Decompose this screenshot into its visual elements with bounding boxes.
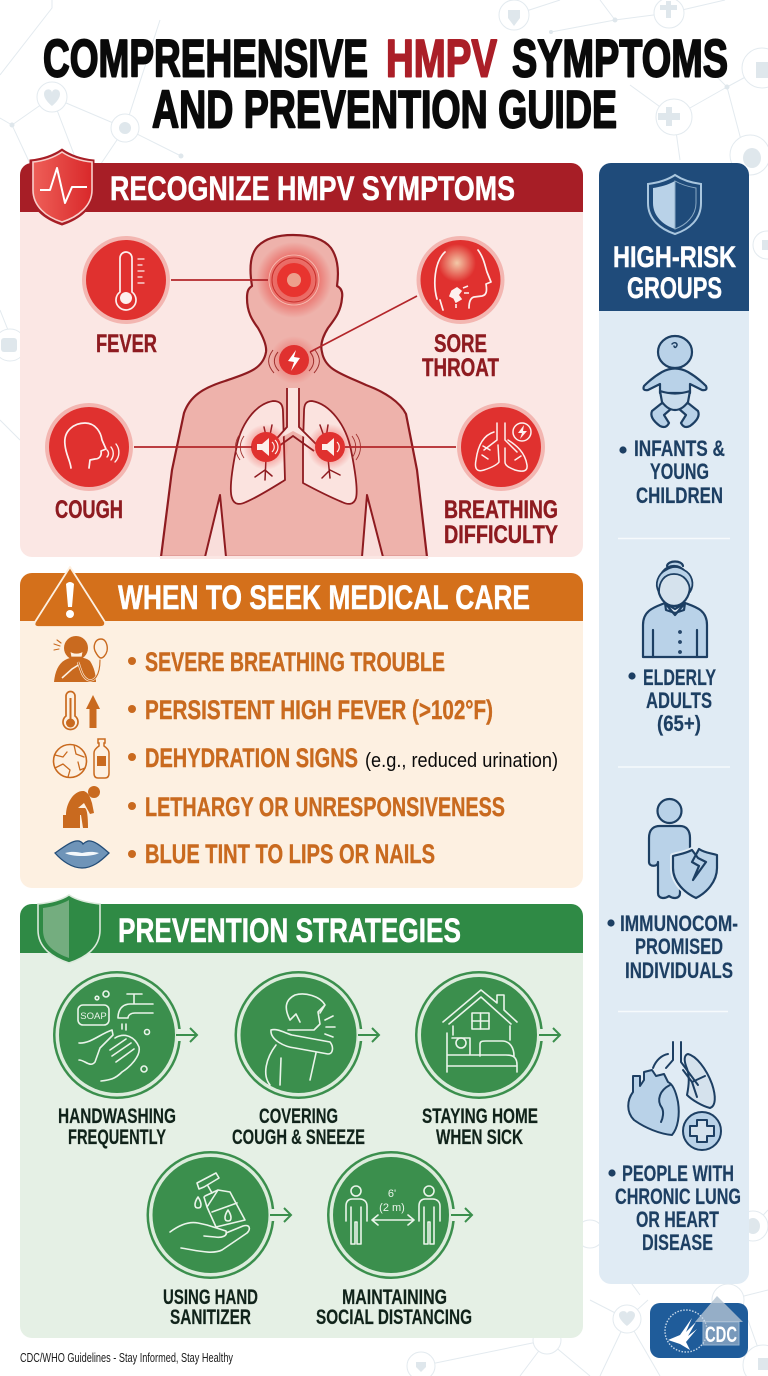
text: infants: INFANTS & (634, 436, 725, 461)
strategy: covering cough (234, 971, 379, 1099)
text: immunocompromised (607, 911, 738, 983)
icon: high fever thermometer (63, 692, 100, 730)
panel: prevention strategies (20, 895, 583, 1338)
icon: dehydration (54, 739, 109, 778)
icon: warning triangle (34, 567, 105, 627)
panel: high-risk groups (599, 163, 749, 1284)
heading: prevention: PREVENTION STRATEGIES (118, 912, 461, 950)
label: handwashing: HANDWASHING (58, 1104, 176, 1128)
strategy: social distancing: (2 m) (379, 1202, 405, 1214)
text: dehydration signs: DEHYDRATION SIGNS (145, 743, 358, 773)
title: HMPV (386, 30, 497, 88)
icon: person with oxygen mask (54, 636, 107, 682)
footer note: CDC/WHO Guidelines - Stay Informed, Stay Healthy (20, 1351, 234, 1365)
label: covering cough: COUGH & SNEEZE (232, 1125, 365, 1149)
panel: when to seek medical care (20, 567, 583, 888)
label: covering cough (232, 1104, 365, 1149)
text: severe breathing trouble: SEVERE BREATHING TROUBLE (145, 647, 445, 677)
text: dehydration signs: (e.g., reduced urination) (365, 750, 558, 772)
text: chronic disease: DISEASE (642, 1230, 713, 1255)
heading: seek care: WHEN TO SEEK MEDICAL CARE (118, 579, 530, 617)
throat pain marker (269, 336, 319, 384)
icon: lethargy (63, 786, 100, 828)
label: social distancing (316, 1285, 472, 1329)
label: hand sanitizer (163, 1285, 258, 1329)
icon: cough (45, 403, 133, 491)
label: sore throat: SORE (434, 330, 487, 358)
text: infants: CHILDREN (636, 483, 723, 508)
label: sore throat (422, 330, 499, 382)
text: elderly: ADULTS (646, 688, 712, 713)
label: staying home: WHEN SICK (436, 1125, 523, 1149)
text: chronic disease (608, 1161, 741, 1255)
text: elderly: ELDERLY (643, 665, 716, 690)
text: persistent high fever: PERSISTENT HIGH FEVER (>102°F) (145, 695, 493, 725)
icon: infant (644, 336, 706, 427)
strategy: handwashing (53, 971, 197, 1099)
icon: breathing difficulty (457, 403, 545, 491)
text: immunocompromised: INDIVIDUALS (625, 958, 733, 983)
text: immunocompromised: PROMISED (635, 934, 723, 959)
label: breathing difficulty: BREATHING (444, 496, 558, 524)
heading: high-risk groups (613, 241, 736, 305)
label: staying home (422, 1104, 538, 1149)
lung sound markers (236, 424, 360, 470)
label: sore throat: THROAT (422, 354, 499, 382)
icon: elderly adult (643, 562, 707, 657)
icon: fever thermometer (82, 236, 170, 324)
label: social distancing: SOCIAL DISTANCING (316, 1305, 472, 1329)
head pain marker (256, 242, 332, 318)
label: covering cough: COVERING (259, 1104, 338, 1128)
text: lethargy: LETHARGY OR UNRESPONSIVENESS (145, 792, 505, 822)
label: hand sanitizer: SANITIZER (170, 1305, 251, 1329)
icon: immunocompromised (649, 799, 717, 898)
text: blue tint: BLUE TINT TO LIPS OR NAILS (145, 839, 435, 869)
label: cough: COUGH (55, 496, 123, 524)
text: elderly: (65+) (657, 711, 701, 736)
panel: recognize HMPV symptoms (20, 149, 583, 559)
icon: green shield (38, 895, 100, 963)
label: fever: FEVER (96, 330, 157, 358)
lungs (231, 401, 357, 504)
strategy: social distancing: 6' (388, 1188, 396, 1200)
label: handwashing: FREQUENTLY (68, 1125, 166, 1149)
heading: high-risk groups: HIGH-RISK (613, 241, 736, 274)
label: staying home: STAYING HOME (422, 1104, 538, 1128)
text: infants: YOUNG (650, 459, 709, 484)
icon: heartbeat shield (30, 149, 94, 225)
icon: blue shield (648, 175, 701, 234)
text: infants (619, 436, 725, 508)
CDC logo: CDC (705, 1322, 737, 1347)
title: COMPREHENSIVE (43, 30, 368, 88)
heading: recognize symptoms: RECOGNIZE HMPV SYMPTOMS (110, 170, 515, 208)
text: severe breathing trouble (128, 647, 445, 677)
icon: heart and lungs (628, 1042, 721, 1150)
body diagram (160, 235, 428, 559)
label: social distancing: MAINTAINING (342, 1285, 447, 1309)
strategy: social distancing (327, 1151, 472, 1279)
title (43, 30, 728, 140)
label: hand sanitizer: USING HAND (163, 1285, 258, 1309)
text: chronic disease: OR HEART (636, 1207, 719, 1232)
icon: sore throat (416, 236, 504, 324)
label: breathing difficulty (444, 496, 558, 549)
connector lines (134, 280, 456, 447)
text: dehydration signs (128, 743, 558, 773)
strategy: staying home (415, 971, 560, 1099)
CDC logo (650, 1296, 748, 1358)
label: handwashing (58, 1104, 176, 1149)
label: breathing difficulty: DIFFICULTY (444, 521, 558, 549)
icon: blue lips (55, 841, 109, 868)
strategy: hand sanitizer (146, 1151, 291, 1279)
heading: high-risk groups: GROUPS (627, 272, 722, 305)
text: elderly (628, 665, 716, 736)
strategy: handwashing: SOAP (80, 1011, 107, 1022)
